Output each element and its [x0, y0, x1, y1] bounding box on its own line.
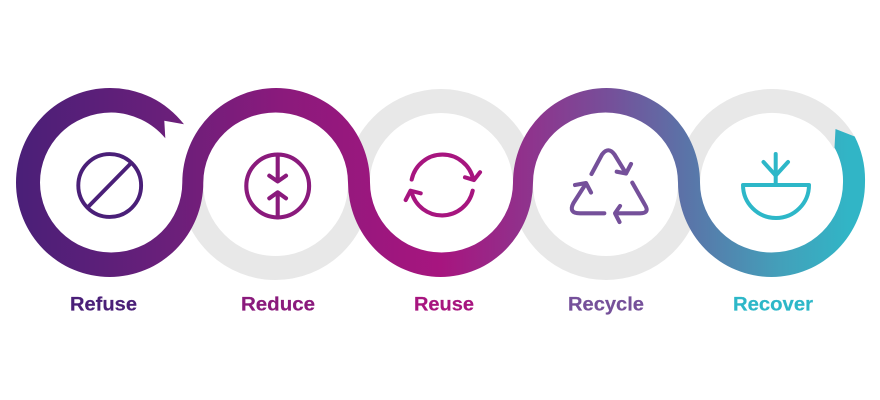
icon: reuse circular arrows — [406, 155, 480, 215]
icon: reduce arrows converging — [246, 155, 309, 218]
label: Reuse: Reuse — [414, 294, 474, 316]
white circle interiors — [40, 112, 843, 256]
label: Recycle: Recycle — [568, 294, 644, 316]
icon: recover plant in bowl — [743, 154, 809, 218]
label: Recover: Recover — [733, 294, 813, 316]
label: Reduce: Reduce — [241, 294, 315, 316]
grey background ring segments — [192, 101, 844, 268]
icon: refuse prohibition sign — [78, 154, 141, 217]
gradient wave ribbon with swallowtail start and pointed end — [16, 88, 865, 277]
label: Refuse: Refuse — [70, 294, 137, 316]
icon: recycle triangle arrows — [572, 150, 647, 222]
